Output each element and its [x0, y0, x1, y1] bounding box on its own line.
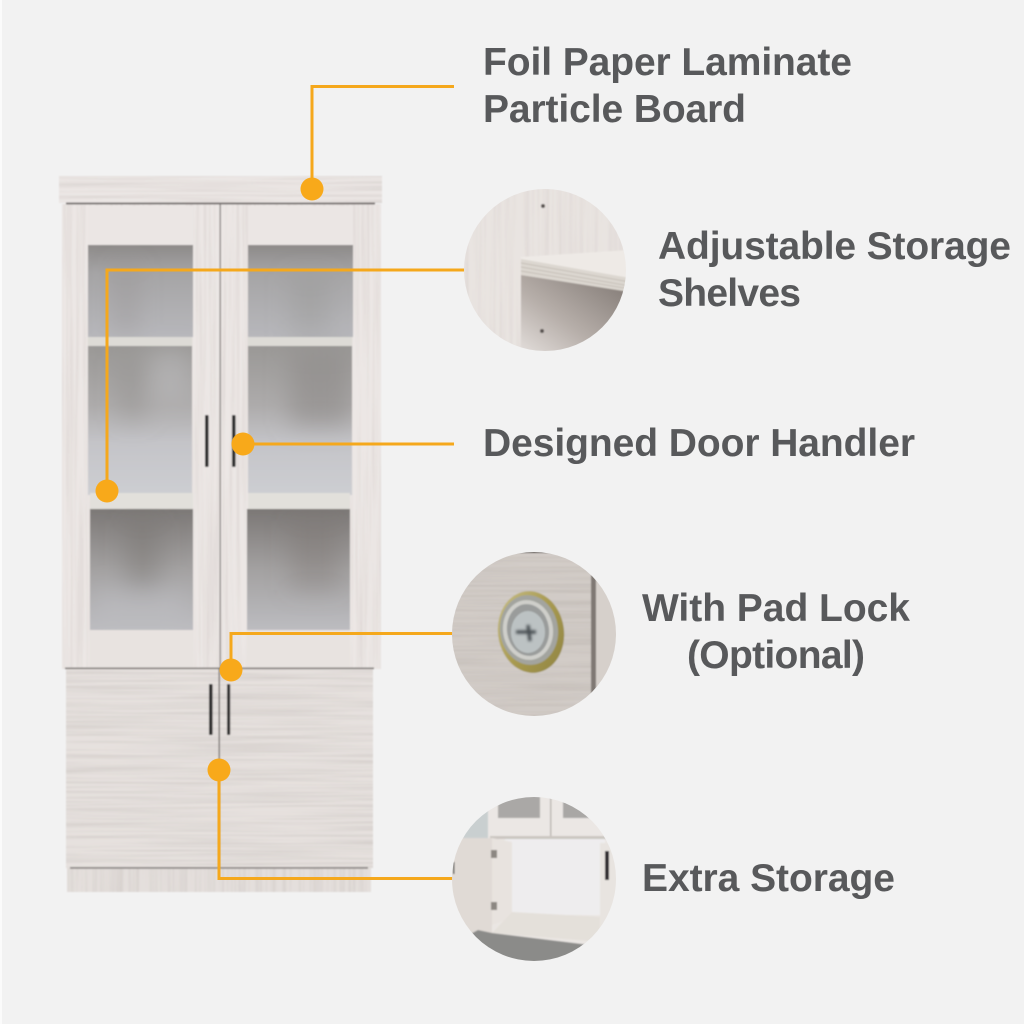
glass reflections — [120, 290, 352, 594]
label: with pad lock: (Optional) — [687, 634, 865, 677]
door handles — [205, 415, 236, 735]
label: adjustable storage shelves: Adjustable Storage — [658, 225, 1011, 268]
label: foil paper laminate: Foil Paper Laminate — [483, 41, 852, 84]
label: with pad lock: With Pad Lock — [642, 587, 910, 630]
right door glass panes — [247, 245, 353, 630]
label: foil paper laminate — [483, 41, 852, 131]
label: foil paper laminate: Particle Board — [483, 88, 746, 131]
cabinet illustration — [59, 176, 382, 892]
callout dots — [96, 178, 324, 782]
detail photo: pad lock — [450, 550, 620, 720]
detail photo: extra storage — [450, 794, 620, 964]
label: designed door handler: Designed Door Handler — [483, 422, 915, 465]
left door glass panes — [88, 245, 193, 630]
plinth base — [67, 867, 371, 892]
upper glass door section — [62, 204, 381, 669]
lower door section — [65, 668, 374, 868]
callout connector lines — [107, 86, 464, 878]
label: with pad lock — [642, 587, 910, 677]
label: extra storage: Extra Storage — [642, 857, 895, 900]
label: adjustable storage shelves — [658, 225, 1011, 315]
top board — [59, 176, 382, 204]
label: adjustable storage shelves: Shelves — [658, 272, 801, 315]
detail photo: adjustable shelf — [460, 185, 630, 355]
lock cylinder — [497, 590, 565, 674]
